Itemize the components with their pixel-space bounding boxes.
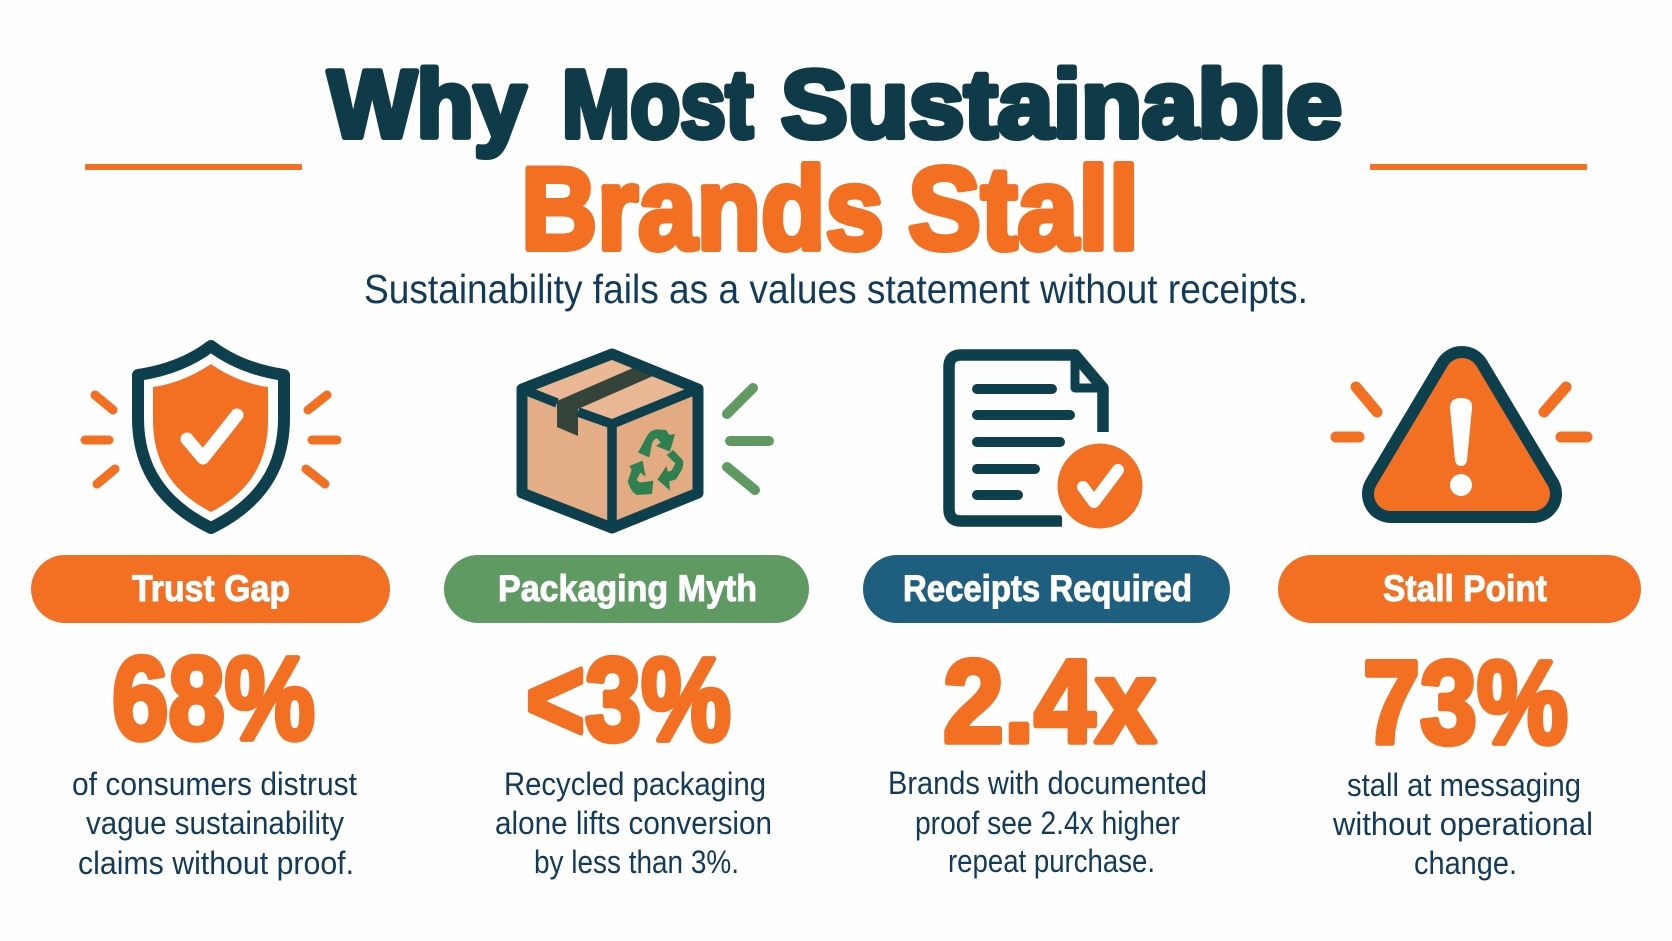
icon: document with check badge bbox=[949, 355, 1149, 535]
description: proof see 2.4x higher bbox=[915, 805, 1180, 841]
badge: Packaging Myth bbox=[444, 555, 809, 623]
description: alone lifts conversion bbox=[495, 805, 772, 841]
subtitle: Sustainability fails as a values statement without receipts. bbox=[364, 266, 1308, 312]
tape bbox=[557, 368, 653, 436]
badge: Receipts Required bbox=[863, 555, 1230, 623]
description: stall at messaging bbox=[1347, 767, 1581, 803]
icon: shield with check bbox=[85, 346, 337, 528]
badge: Receipts Required: Receipts Required bbox=[903, 568, 1192, 609]
description: Brands with documented bbox=[888, 765, 1207, 801]
title: Sustainable bbox=[781, 51, 1342, 158]
badge: Trust Gap: Trust Gap bbox=[132, 568, 290, 609]
panel: stall point bbox=[1278, 375, 1641, 881]
stat: 2.4x: 2.4x bbox=[943, 636, 1156, 768]
title bbox=[328, 51, 1342, 274]
panel: trust gap bbox=[31, 346, 390, 881]
description: Recycled packaging bbox=[504, 766, 766, 802]
badge: Trust Gap bbox=[31, 555, 390, 623]
description: by less than 3%. bbox=[534, 844, 739, 880]
description bbox=[1332, 767, 1593, 881]
stat: <3%: <3% bbox=[526, 634, 731, 766]
description: claims without proof. bbox=[78, 845, 354, 881]
stat: 73%: 73% bbox=[1363, 637, 1568, 769]
recycling symbol bbox=[628, 429, 683, 495]
left title accent line bbox=[85, 164, 302, 170]
badge: Stall Point: Stall Point bbox=[1383, 568, 1547, 609]
title: Brands bbox=[521, 143, 884, 274]
description: change. bbox=[1414, 845, 1517, 881]
panel: receipts required bbox=[863, 355, 1230, 879]
icon: cardboard box with recycling symbol bbox=[522, 354, 769, 528]
description bbox=[888, 765, 1207, 879]
badge: Stall Point bbox=[1278, 555, 1641, 623]
description: repeat purchase. bbox=[948, 843, 1155, 879]
title: Why bbox=[328, 51, 526, 158]
description: vague sustainability bbox=[86, 805, 344, 841]
description bbox=[72, 766, 357, 881]
title: Most bbox=[562, 51, 753, 158]
icon: warning triangle bbox=[1336, 375, 1587, 496]
description bbox=[495, 766, 772, 880]
panel: packaging myth bbox=[444, 354, 809, 880]
description: of consumers distrust bbox=[72, 766, 357, 802]
description: without operational bbox=[1332, 806, 1593, 842]
stat: 68%: 68% bbox=[112, 633, 315, 765]
title: Stall bbox=[908, 143, 1139, 274]
right title accent line bbox=[1370, 164, 1587, 170]
badge: Packaging Myth: Packaging Myth bbox=[498, 568, 757, 609]
